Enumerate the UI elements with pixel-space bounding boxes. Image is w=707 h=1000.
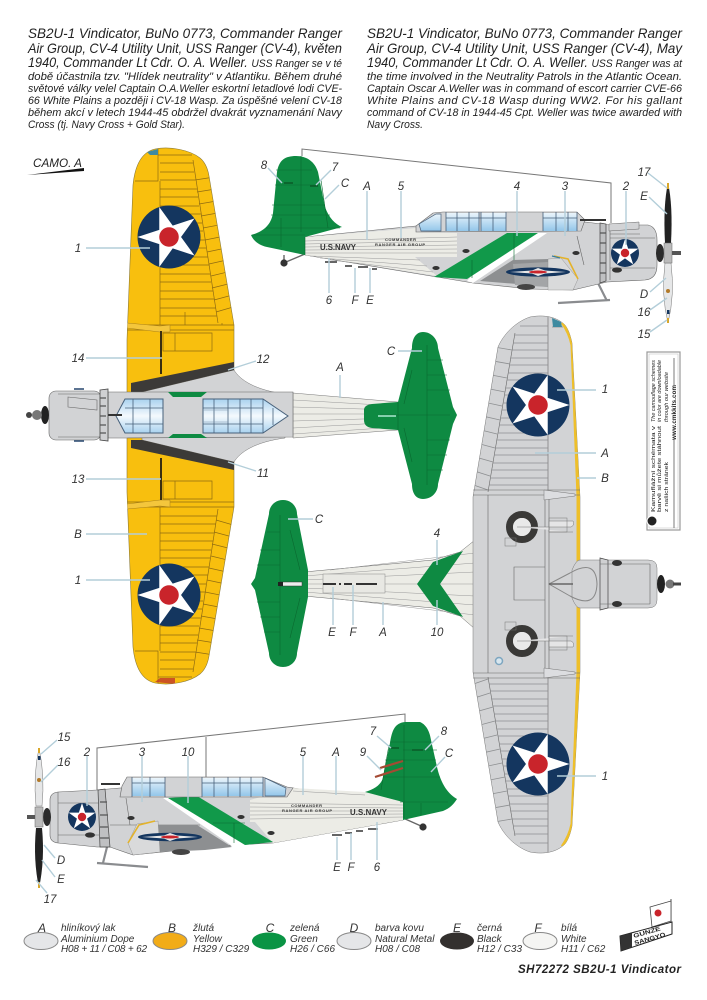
wheel 2	[505, 622, 574, 654]
legend: colour E: H12 / C33	[477, 944, 522, 955]
labels and leaders lower side view: 15	[58, 732, 71, 744]
English description text: White Plains and CV-18 Wasp during WW2. For his gallant	[367, 95, 683, 107]
yellow upper wing	[127, 148, 240, 684]
labels and leaders lower side view: E	[57, 874, 65, 886]
labels and leaders lower side view: 10	[182, 747, 195, 759]
propeller	[27, 748, 51, 888]
legend: colour E: E	[453, 921, 462, 935]
green fin and rudder	[365, 722, 457, 820]
labels and leaders underside view: A	[378, 627, 387, 639]
commander marking	[375, 237, 425, 247]
tail wheel	[280, 254, 305, 267]
English description text: the time involved in the Neutrality Patrols in the Atlantic Ocean.	[367, 71, 682, 83]
English description text: Navy Cross.	[367, 119, 423, 131]
legend: colour C: C	[266, 921, 275, 935]
website note box: Kamuflážní schémata v	[651, 426, 657, 512]
corrugated rear fuselage	[250, 788, 403, 843]
gun	[580, 219, 606, 221]
English description text	[366, 26, 683, 131]
English description text: command of CV-18 in 1944-45 Cpt. Weller was twice awarded with	[367, 107, 682, 119]
labels and leaders lower side view: 8	[441, 726, 448, 738]
legend: colour B: B	[168, 921, 176, 935]
green chevron band	[417, 551, 463, 617]
upper wing roundel 1	[138, 206, 200, 268]
labels and leaders underside view: 1	[602, 384, 608, 396]
wheel 1	[505, 514, 574, 546]
antenna wires	[97, 714, 405, 798]
main landing gear and ski	[558, 283, 610, 303]
legend: colour E: Black	[477, 934, 502, 945]
product title: SH72272 SB2U-1 Vindicator	[518, 964, 682, 976]
labels and leaders lower side view: A	[331, 747, 340, 759]
cowling panels	[432, 222, 655, 283]
Czech description text: době účastnila tzv. "Hlídek neutrality" v Atlantiku. Během druhé	[28, 71, 342, 83]
website note box: through our website	[664, 372, 670, 422]
English description text: 1940, Commander Lt Cdr. O. A. Weller. USS Ranger was at	[367, 55, 683, 70]
legend: colour A: Aluminium Dope	[60, 934, 135, 945]
wing root and undercarriage bay	[480, 256, 578, 290]
small pale blue circle under wing	[496, 658, 502, 664]
labels and leaders top view	[72, 243, 422, 587]
legend: colour A: hliníkový lak	[61, 923, 116, 934]
labels and leaders underside view: C	[315, 514, 324, 526]
labels and leaders lower side view: E	[333, 862, 341, 874]
underside roundel 1	[506, 374, 570, 436]
black walkways	[131, 362, 234, 470]
English description text: Air Group, CV-4 Utility Unit, USS Ranger (CV-4), May	[366, 41, 683, 56]
labels and leaders underside view	[288, 384, 609, 783]
corrugated rear fuselage	[305, 228, 457, 276]
labels and leaders lower side view: D	[57, 855, 65, 867]
labels and leaders lower side view: 17	[44, 894, 57, 906]
propeller hub top view	[26, 406, 49, 424]
labels and leaders upper side view: 16	[638, 307, 651, 319]
upper side view aircraft	[251, 149, 681, 323]
website note box	[647, 352, 680, 530]
labels and leaders top view: C	[387, 346, 396, 358]
legend: colour E: černá	[477, 923, 502, 934]
legend: colour D: D	[350, 921, 359, 935]
labels and leaders lower side view: 5	[300, 747, 307, 759]
legend: colour D: H08 / C08	[375, 944, 420, 955]
labels and leaders upper side view: 6	[326, 295, 333, 307]
legend: colour B: Yellow	[193, 934, 223, 945]
underside view aircraft	[251, 316, 681, 853]
canopy	[120, 777, 293, 797]
gun	[100, 414, 122, 416]
camouflage label	[27, 158, 84, 175]
legend: colour D: barva kovu	[375, 923, 424, 934]
wing root	[128, 821, 232, 855]
underside rear fuselage	[304, 540, 475, 629]
Czech description text: během akcí v letech 1944-45 obdržel dvakrát vyznamenání Navy	[28, 107, 343, 119]
fuselage grey	[305, 222, 657, 290]
fuselage	[50, 788, 403, 855]
underside stencils	[332, 829, 378, 835]
info icon	[647, 516, 657, 526]
Czech description text: SB2U-1 Vindicator, BuNo 0773, Commander Ranger	[28, 26, 343, 41]
labels and leaders underside view: 10	[431, 627, 444, 639]
legend: colour C: H26 / C66	[290, 944, 335, 955]
legend: colour F: H11 / C62	[561, 944, 606, 955]
camouflage label: CAMO. A	[33, 158, 82, 170]
underside roundel 2	[506, 732, 570, 796]
labels and leaders upper side view: C	[341, 178, 350, 190]
commander marking: RANGER AIR GROUP	[282, 808, 332, 813]
labels and leaders upper side view: 15	[638, 329, 651, 341]
fuselage roundel	[611, 239, 639, 267]
cowling underside	[549, 558, 657, 610]
antenna wire	[302, 149, 611, 223]
labels and leaders top view: B	[74, 529, 82, 541]
Czech description text: 1940, Commander Lt Cdr. O. A. Weller. USS Ranger se v té	[28, 55, 342, 70]
English description text: Captain Oscar A.Weller was in command of escort carrier CVE-66	[367, 83, 683, 95]
commander marking: COMMANDER	[291, 803, 322, 808]
website note box: in color are downloadable	[657, 360, 663, 422]
Czech description text: Cross (tj. Navy Cross + Gold Star).	[28, 119, 185, 131]
website note box: www.cmkkits.com	[671, 385, 678, 441]
legend: colour A: H08 + 11 / C08 + 62	[61, 944, 147, 955]
labels and leaders upper side view: 2	[622, 181, 630, 193]
labels and leaders top view: 13	[72, 474, 85, 486]
legend: colour F	[523, 921, 606, 955]
labels and leaders underside view: A	[600, 448, 609, 460]
legend: colour F: bílá	[561, 923, 578, 934]
top view: upper surface aircraft	[26, 148, 457, 684]
fin stencils	[391, 748, 423, 750]
legend: colour D	[337, 921, 435, 955]
labels and leaders lower side view: 7	[370, 726, 377, 738]
fuselage roundel	[68, 803, 96, 831]
propeller hub underside	[657, 575, 681, 593]
labels and leaders upper side view: E	[366, 295, 374, 307]
main gear and ski	[97, 847, 148, 867]
canopy	[416, 212, 585, 232]
propeller	[656, 183, 681, 323]
lower side view aircraft	[27, 714, 457, 888]
labels and leaders underside view: E	[328, 627, 336, 639]
legend: colour A	[24, 921, 147, 955]
fin and rudder green	[251, 156, 342, 255]
labels and leaders underside view: 4	[434, 528, 440, 540]
rear fuselage corrugated	[293, 393, 398, 438]
labels and leaders upper side view: D	[640, 289, 648, 301]
green stabilizer top view	[364, 332, 457, 499]
commander marking	[282, 803, 332, 813]
red fin stripes	[375, 761, 403, 777]
Czech description text: 66 White Plains a později i CV-18 Wasp. Za úspěšné velení CV-18	[28, 95, 343, 107]
website note box: barvě si můžete stáhnout	[656, 425, 663, 512]
labels and leaders top view: 1	[75, 575, 81, 587]
cowling top view	[49, 389, 108, 441]
canopy glazing rear	[203, 399, 288, 433]
labels and leaders lower side view: C	[445, 748, 454, 760]
legend: colour B	[153, 921, 250, 955]
labels and leaders top view: A	[335, 362, 344, 374]
fuselage upper	[108, 392, 293, 438]
labels and leaders underside view: 1	[602, 771, 608, 783]
Gunze Sangyo logo	[620, 899, 672, 951]
labels and leaders lower side view: 3	[139, 747, 146, 759]
legend: colour B: žlutá	[192, 923, 215, 934]
Czech description text: světové války velel Captain O.A.Weller eskortní letadlové lodi CVE-	[28, 83, 342, 95]
canopy glazing front	[116, 399, 163, 433]
legend: colour C: zelená	[289, 923, 320, 934]
legend: colour D: Natural Metal	[375, 934, 435, 945]
tail wheel	[403, 818, 427, 831]
labels and leaders top view: 14	[72, 353, 84, 365]
commander marking: RANGER AIR GROUP	[375, 242, 425, 247]
labels and leaders underside view: B	[601, 473, 609, 485]
ventral fairing with white and black stripes	[323, 574, 385, 593]
Czech description text: Air Group, CV-4 Utility Unit, USS Ranger (CV-4), květen	[27, 41, 342, 56]
labels and leaders lower side view: 2	[83, 747, 91, 759]
labels and leaders underside view: F	[349, 627, 357, 639]
legend: colour A: A	[37, 921, 46, 935]
labels and leaders upper side view: 17	[638, 167, 651, 179]
English description text: SB2U-1 Vindicator, BuNo 0773, Commander Ranger	[367, 26, 683, 41]
labels and leaders upper side view: 3	[562, 181, 569, 193]
labels and leaders upper side view: 8	[261, 160, 268, 172]
labels and leaders lower side view: 16	[58, 757, 71, 769]
labels and leaders upper side view: F	[351, 295, 359, 307]
website note box: z našich stránek	[664, 462, 670, 512]
Gunze Sangyo logo: SANGYO	[634, 932, 667, 947]
legend: colour C	[252, 921, 335, 955]
wing root grey fillets	[142, 370, 285, 462]
website note box: The camouflage schemes	[651, 360, 657, 422]
labels and leaders lower side view: 9	[360, 747, 367, 759]
labels and leaders upper side view: 7	[332, 162, 339, 174]
wing-root green strips	[168, 392, 207, 438]
legend: colour F: White	[561, 934, 587, 945]
commander marking: COMMANDER	[385, 237, 416, 242]
Czech description text	[27, 26, 343, 131]
labels and leaders top view: 12	[257, 354, 270, 366]
fin stencils	[284, 183, 318, 186]
cowling panels	[58, 789, 275, 847]
green tail underside	[251, 500, 308, 667]
labels and leaders lower side view	[36, 726, 454, 906]
labels and leaders upper side view: A	[362, 181, 371, 193]
grey underside wing	[465, 316, 580, 853]
legend: colour E	[440, 921, 522, 955]
gun	[101, 783, 120, 785]
labels and leaders lower side view: F	[347, 862, 355, 874]
green band	[163, 796, 273, 848]
green fuselage band	[434, 233, 547, 283]
legend: colour F: F	[534, 921, 542, 935]
upper wing roundel 2	[138, 564, 200, 626]
labels and leaders upper side view	[261, 160, 667, 341]
labels and leaders top view: 11	[257, 468, 269, 480]
flattened roundel	[138, 833, 202, 841]
legend: colour C: Green	[290, 934, 318, 945]
legend: colour B: H329 / C329	[193, 944, 250, 955]
Gunze Sangyo logo: GUNZE	[633, 926, 661, 940]
flattened wing roundel	[506, 267, 570, 277]
US NAVY marking: U.S.NAVY	[350, 808, 388, 817]
underside stencils	[325, 262, 377, 269]
labels and leaders upper side view: 5	[398, 181, 405, 193]
labels and leaders lower side view: 6	[374, 862, 381, 874]
labels and leaders upper side view: E	[640, 191, 648, 203]
labels and leaders upper side view: 4	[514, 181, 520, 193]
US NAVY marking: U.S.NAVY	[320, 243, 357, 252]
labels and leaders top view: 1	[75, 243, 81, 255]
